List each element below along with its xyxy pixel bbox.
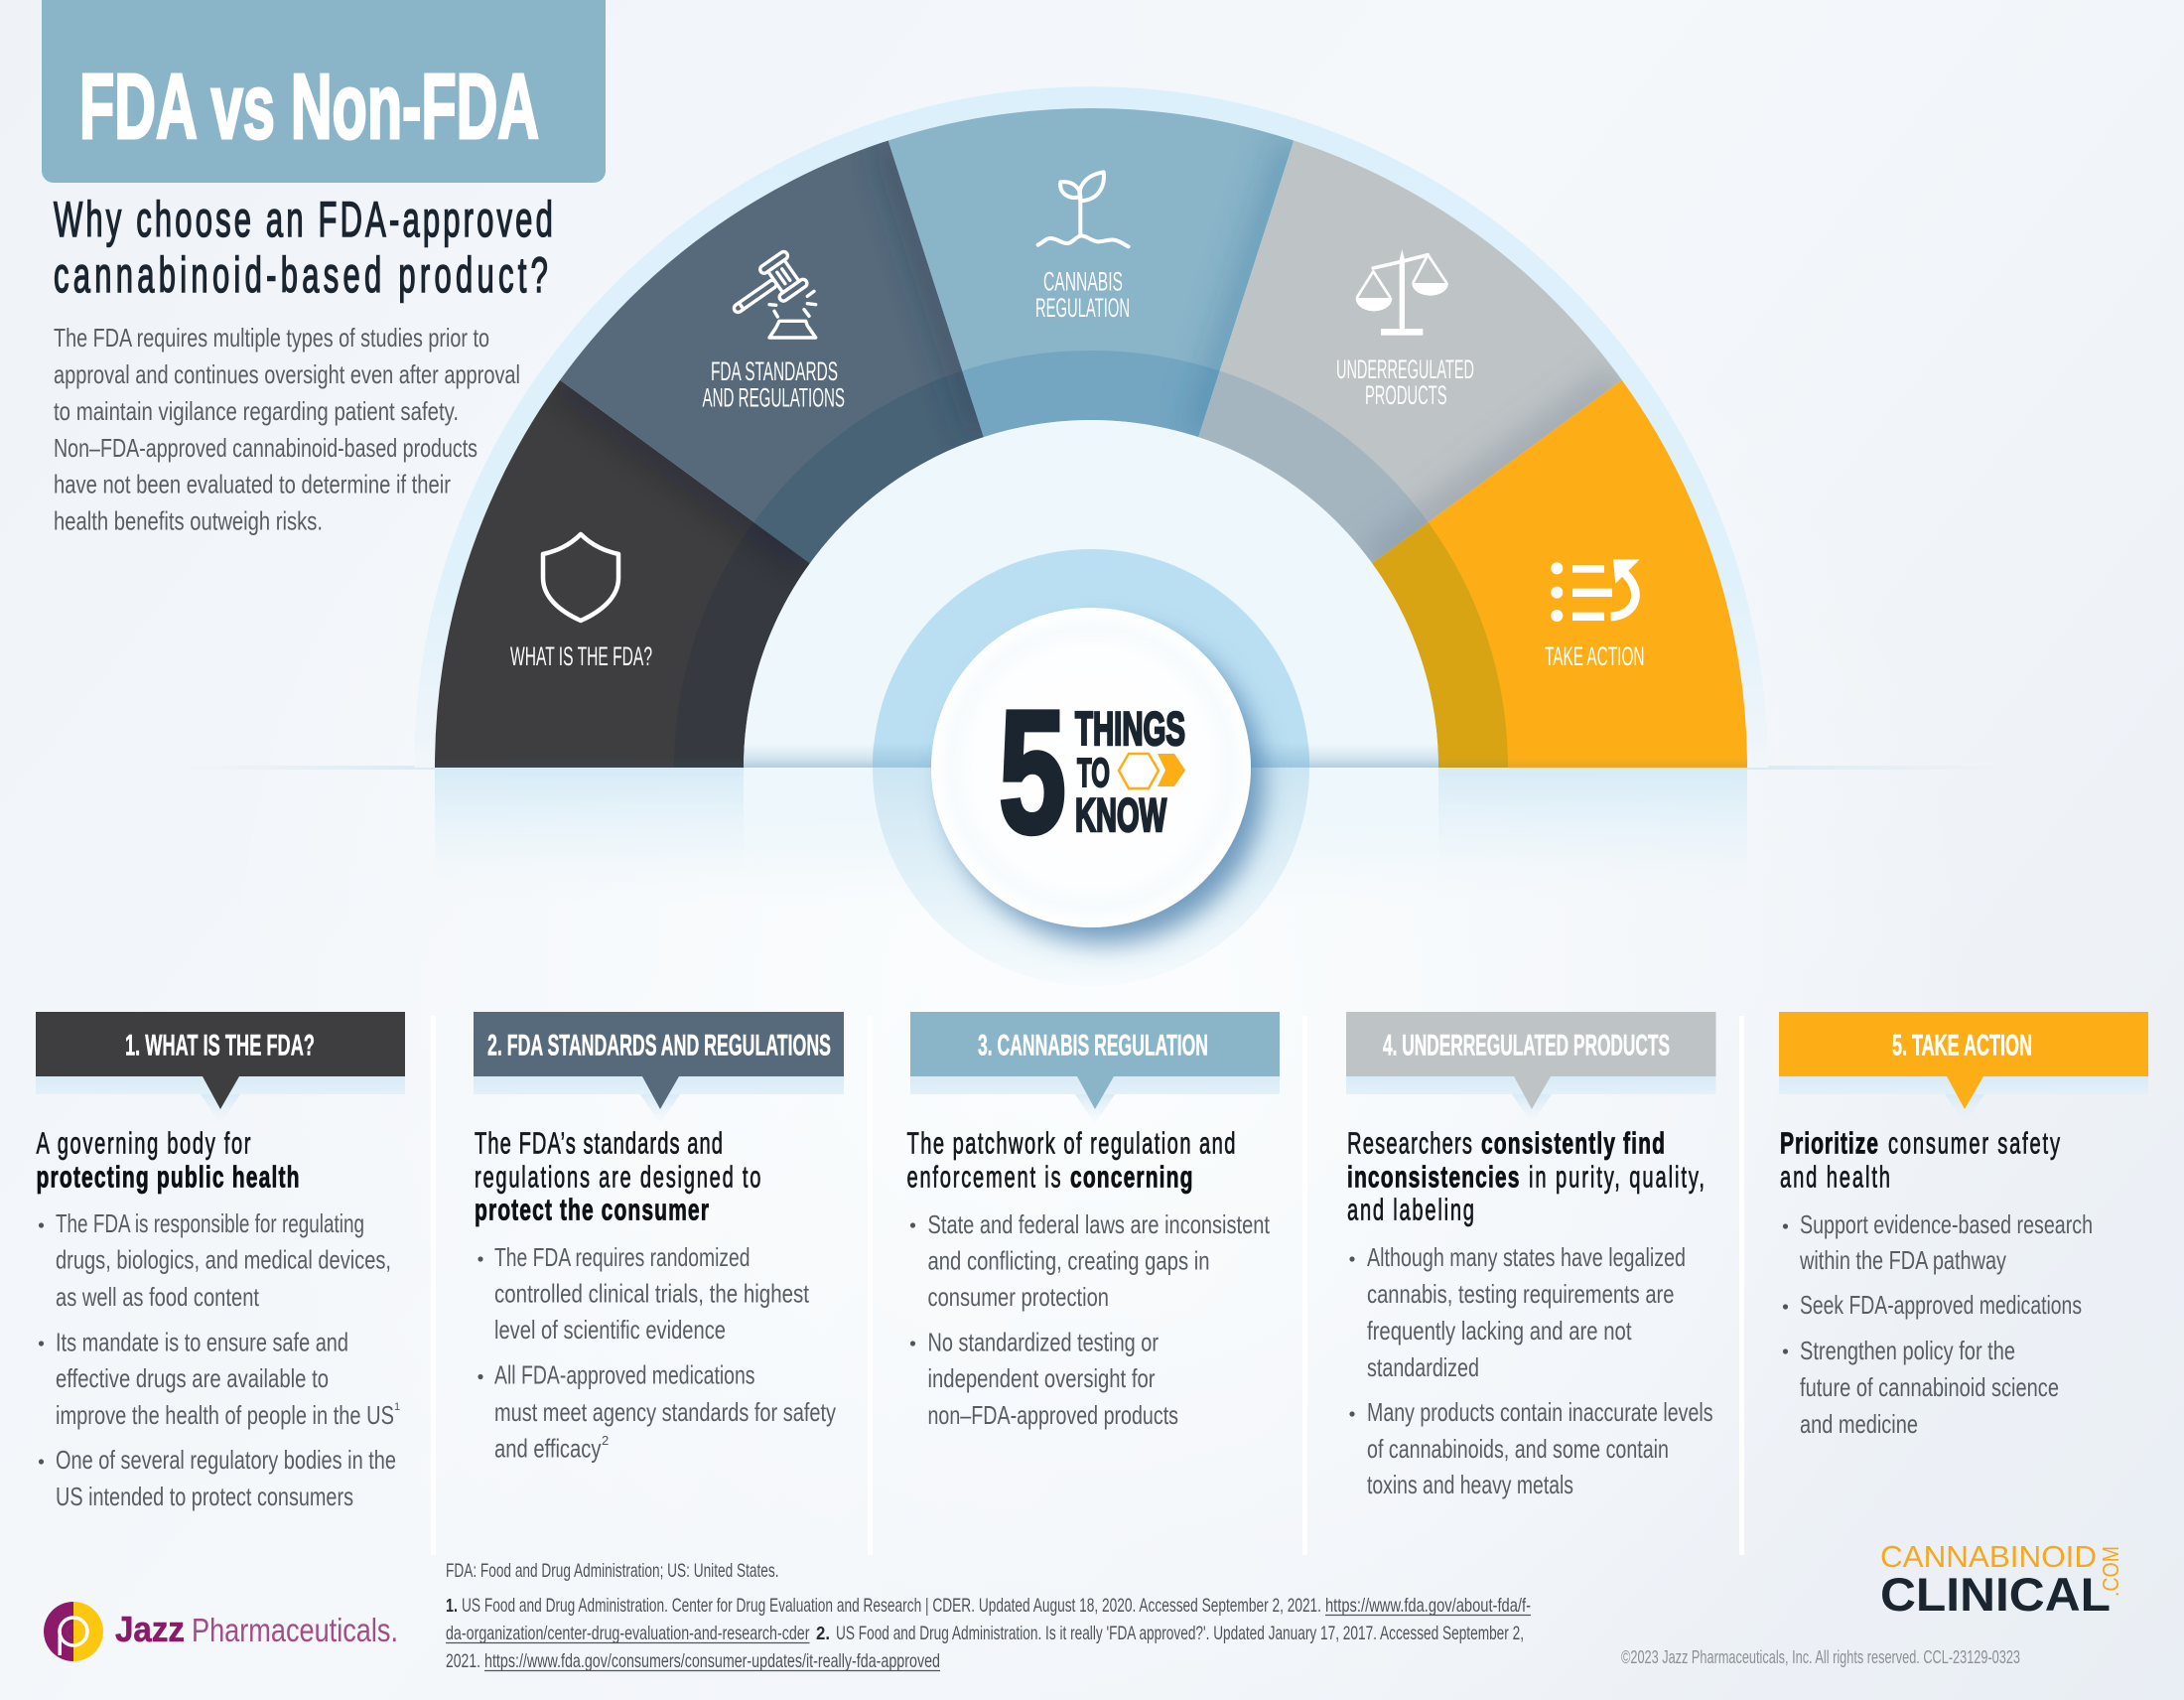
subtitle heading: cannabinoid-based product? <box>54 246 548 303</box>
intro text block <box>54 323 520 536</box>
center ring <box>873 549 1309 986</box>
semicircle halo <box>414 86 1768 768</box>
bullets 3: consumer protection <box>927 1282 1109 1312</box>
heading 2: The FDA’s standards and <box>475 1125 723 1161</box>
bullets 3: State and federal laws are inconsistent <box>927 1209 1271 1239</box>
inner semicircle <box>744 420 1438 768</box>
bullets 4: Although many states have legalized <box>1367 1242 1686 1272</box>
heading 4: and labeling <box>1347 1192 1474 1227</box>
label group: underregulated products <box>1336 249 1474 410</box>
bullets 3: No standardized testing or <box>927 1327 1159 1356</box>
bullets 1: drugs, biologics, and medical devices, <box>56 1245 391 1275</box>
5 things to know logo: TO <box>1077 750 1110 795</box>
footnotes: https://www.fda.gov/consumers/consumer-updates/it-really-fda-approved <box>484 1650 940 1672</box>
icon: hexagon <box>1119 754 1159 788</box>
bullets 1: as well as food content <box>56 1282 260 1312</box>
label group: what is the FDA: WHAT IS THE FDA? <box>510 641 652 671</box>
intro text block: to maintain vigilance regarding patient safety. <box>54 396 459 426</box>
bullets 1: effective drugs are available to <box>56 1363 329 1393</box>
header tab 2: 2. FDA STANDARDS AND REGULATIONS <box>487 1029 831 1062</box>
bullets 3: independent oversight for <box>927 1363 1156 1393</box>
band below semicircle <box>435 768 1747 917</box>
heading 1: protecting public health <box>36 1159 299 1195</box>
bullets 3 <box>910 1209 1271 1430</box>
bullets 2: All FDA-approved medications <box>494 1360 754 1390</box>
label group: FDA standards: AND REGULATIONS <box>703 383 845 413</box>
heading 4: Researchers <box>1347 1125 1472 1161</box>
segment: underregulated products <box>1198 141 1622 563</box>
label group: cannabis regulation <box>1035 172 1130 323</box>
header tab 5 <box>1779 1012 2148 1124</box>
bullets 2: controlled clinical trials, the highest <box>494 1279 810 1309</box>
icon: plant <box>1038 172 1129 246</box>
bullets 4: frequently lacking and are not <box>1367 1316 1632 1346</box>
label group: underregulated products: PRODUCTS <box>1365 380 1447 410</box>
bullets 2: and efficacy <box>494 1434 602 1464</box>
intro text block: have not been evaluated to determine if their <box>54 469 451 498</box>
bullets 1: Its mandate is to ensure safe and <box>56 1327 348 1356</box>
label group: take action: TAKE ACTION <box>1545 641 1644 671</box>
heading 4: consistently find <box>1481 1125 1665 1161</box>
5 things to know logo: KNOW <box>1075 788 1166 841</box>
subtitle heading <box>54 191 553 303</box>
header tab 5: 5. TAKE ACTION <box>1892 1029 2032 1062</box>
bullets 2: level of scientific evidence <box>494 1315 726 1345</box>
label group: cannabis regulation: CANNABIS <box>1043 266 1123 296</box>
bullets 3: and conflicting, creating gaps in <box>927 1245 1209 1275</box>
disc shadow <box>946 626 1264 943</box>
icon: gavel <box>723 250 816 338</box>
segment: FDA standards <box>560 140 984 563</box>
heading 4: in purity, quality, <box>1529 1159 1705 1195</box>
heading 5: Prioritize <box>1780 1125 1878 1161</box>
footnotes: 2. <box>816 1623 830 1643</box>
bullets 1: 1 <box>394 1401 400 1413</box>
bullets 1: The FDA is responsible for regulating <box>56 1208 364 1238</box>
bullets 1 <box>39 1208 400 1511</box>
segment: what is the FDA <box>435 379 810 768</box>
bullets 4: toxins and heavy metals <box>1367 1470 1573 1499</box>
logo: Jazz Pharmaceuticals <box>44 1602 398 1661</box>
icon: checklist arrow <box>1551 559 1640 622</box>
footnotes: 2021. <box>446 1650 480 1672</box>
heading 4: inconsistencies <box>1347 1159 1519 1195</box>
bullets 2 <box>478 1242 836 1464</box>
heading 5: consumer safety <box>1888 1125 2061 1161</box>
heading 3: enforcement is <box>907 1159 1061 1195</box>
bullets 5: Support evidence-based research <box>1800 1209 2093 1239</box>
label group: what is the FDA <box>510 534 652 671</box>
icon: Jazz mark <box>44 1602 103 1661</box>
intro text block: health benefits outweigh risks. <box>54 506 323 536</box>
heading 2: protect the consumer <box>475 1192 709 1227</box>
heading 4 <box>1347 1125 1705 1227</box>
logo: Cannabinoid Clinical: .COM <box>2098 1546 2123 1597</box>
header tab 1: 1. WHAT IS THE FDA? <box>125 1029 315 1062</box>
semicircle segments <box>435 108 1747 768</box>
segment: take action <box>1372 380 1747 768</box>
bullets 5: future of cannabinoid science <box>1800 1372 2059 1402</box>
bullets 5: Strengthen policy for the <box>1800 1336 2015 1365</box>
footnotes <box>446 1560 1531 1672</box>
panel: cannabis regulation <box>907 1012 1280 1430</box>
bullets 4: cannabis, testing requirements are <box>1367 1279 1674 1309</box>
bullets 2: must meet agency standards for safety <box>494 1397 836 1427</box>
heading 5: and health <box>1780 1159 1890 1195</box>
segment: cannabis regulation <box>888 108 1294 437</box>
bullets 1: improve the health of people in the US <box>56 1400 394 1430</box>
footnotes: https://www.fda.gov/about-fda/f- <box>1325 1595 1531 1617</box>
bullets 1: US intended to protect consumers <box>56 1482 353 1511</box>
baseline shading <box>435 744 1747 768</box>
bullets 5: within the FDA pathway <box>1799 1245 2006 1275</box>
logo: Cannabinoid Clinical: CLINICAL <box>1880 1568 2111 1621</box>
title banner <box>42 0 606 183</box>
logo: Cannabinoid Clinical <box>1880 1539 2123 1621</box>
header tab 2 <box>474 1012 844 1124</box>
bullets 5 <box>1783 1209 2093 1439</box>
footnotes: US Food and Drug Administration. Is it really 'FDA approved?'. Updated January 17, 2017. Accessed September 2, <box>836 1623 1524 1644</box>
header tab 1 <box>36 1012 405 1124</box>
label group: underregulated products: UNDERREGULATED <box>1336 354 1474 384</box>
heading 2: regulations are designed to <box>475 1159 760 1195</box>
center disc <box>931 608 1251 927</box>
logo: Jazz Pharmaceuticals: Pharmaceuticals. <box>192 1612 398 1648</box>
logo: Cannabinoid Clinical: CANNABINOID <box>1880 1539 2097 1574</box>
bullets 5: and medicine <box>1800 1409 1918 1439</box>
subtitle heading: Why choose an FDA-approved <box>54 191 553 247</box>
footnotes: FDA: Food and Drug Administration; US: United States. <box>446 1560 778 1582</box>
bullets 4 <box>1349 1242 1713 1499</box>
footnotes: 1. <box>446 1595 458 1616</box>
bullets 2: The FDA requires randomized <box>494 1242 751 1272</box>
icon: shield <box>543 534 618 621</box>
5 things to know logo <box>999 675 1185 870</box>
heading 5 <box>1780 1125 2061 1195</box>
footnotes: da-organization/center-drug-evaluation-and-research-cder <box>446 1623 810 1644</box>
5 things to know logo: THINGS <box>1075 702 1185 755</box>
bullets 4: standardized <box>1367 1352 1479 1382</box>
header tab 4: 4. UNDERREGULATED PRODUCTS <box>1383 1029 1670 1062</box>
panel: take action <box>1779 1012 2148 1439</box>
bullets 1: One of several regulatory bodies in the <box>56 1445 396 1475</box>
bullets 3: non–FDA-approved products <box>927 1400 1178 1430</box>
bullets 2: 2 <box>602 1433 609 1448</box>
label group: FDA standards: FDA STANDARDS <box>711 356 838 386</box>
bullets 4: Many products contain inaccurate levels <box>1367 1397 1713 1427</box>
header tab 4 <box>1346 1012 1715 1124</box>
icon: chevron <box>1158 754 1185 786</box>
panel: what is the FDA <box>36 1012 405 1511</box>
title banner: FDA vs Non-FDA <box>79 55 539 158</box>
heading 3 <box>907 1125 1235 1195</box>
intro text block: The FDA requires multiple types of studies prior to <box>54 323 489 353</box>
heading 2 <box>475 1125 760 1227</box>
copyright: ©2023 Jazz Pharmaceuticals, Inc. All rights reserved. CCL-23129-0323 <box>1621 1647 2020 1667</box>
column dividers <box>431 1016 1744 1555</box>
label group: FDA standards <box>703 250 845 413</box>
label group: take action <box>1545 559 1644 671</box>
baseline horizontal glow <box>179 766 2005 770</box>
footnotes: US Food and Drug Administration. Center for Drug Evaluation and Research | CDER. Updated August 18, 2020. Accessed September 2, 2021. <box>462 1595 1321 1617</box>
header tab 3 <box>910 1012 1280 1124</box>
logo: Jazz Pharmaceuticals: Jazz <box>115 1609 185 1649</box>
bullets 5: Seek FDA-approved medications <box>1800 1290 2082 1320</box>
5 things to know logo: 5 <box>999 675 1066 870</box>
heading 1: A governing body for <box>36 1125 251 1161</box>
panel: FDA standards and regulations <box>474 1012 844 1464</box>
label group: cannabis regulation: REGULATION <box>1035 293 1130 323</box>
header tab 3: 3. CANNABIS REGULATION <box>978 1029 1208 1062</box>
heading 3: concerning <box>1070 1159 1192 1195</box>
bullets 4: of cannabinoids, and some contain <box>1367 1434 1669 1464</box>
heading 1 <box>36 1125 299 1195</box>
intro text block: Non–FDA-approved cannabinoid-based products <box>54 433 478 463</box>
intro text block: approval and continues oversight even after approval <box>54 359 520 389</box>
panel: underregulated products <box>1346 1012 1715 1499</box>
icon: scales <box>1356 249 1448 336</box>
heading 3: The patchwork of regulation and <box>907 1125 1235 1161</box>
